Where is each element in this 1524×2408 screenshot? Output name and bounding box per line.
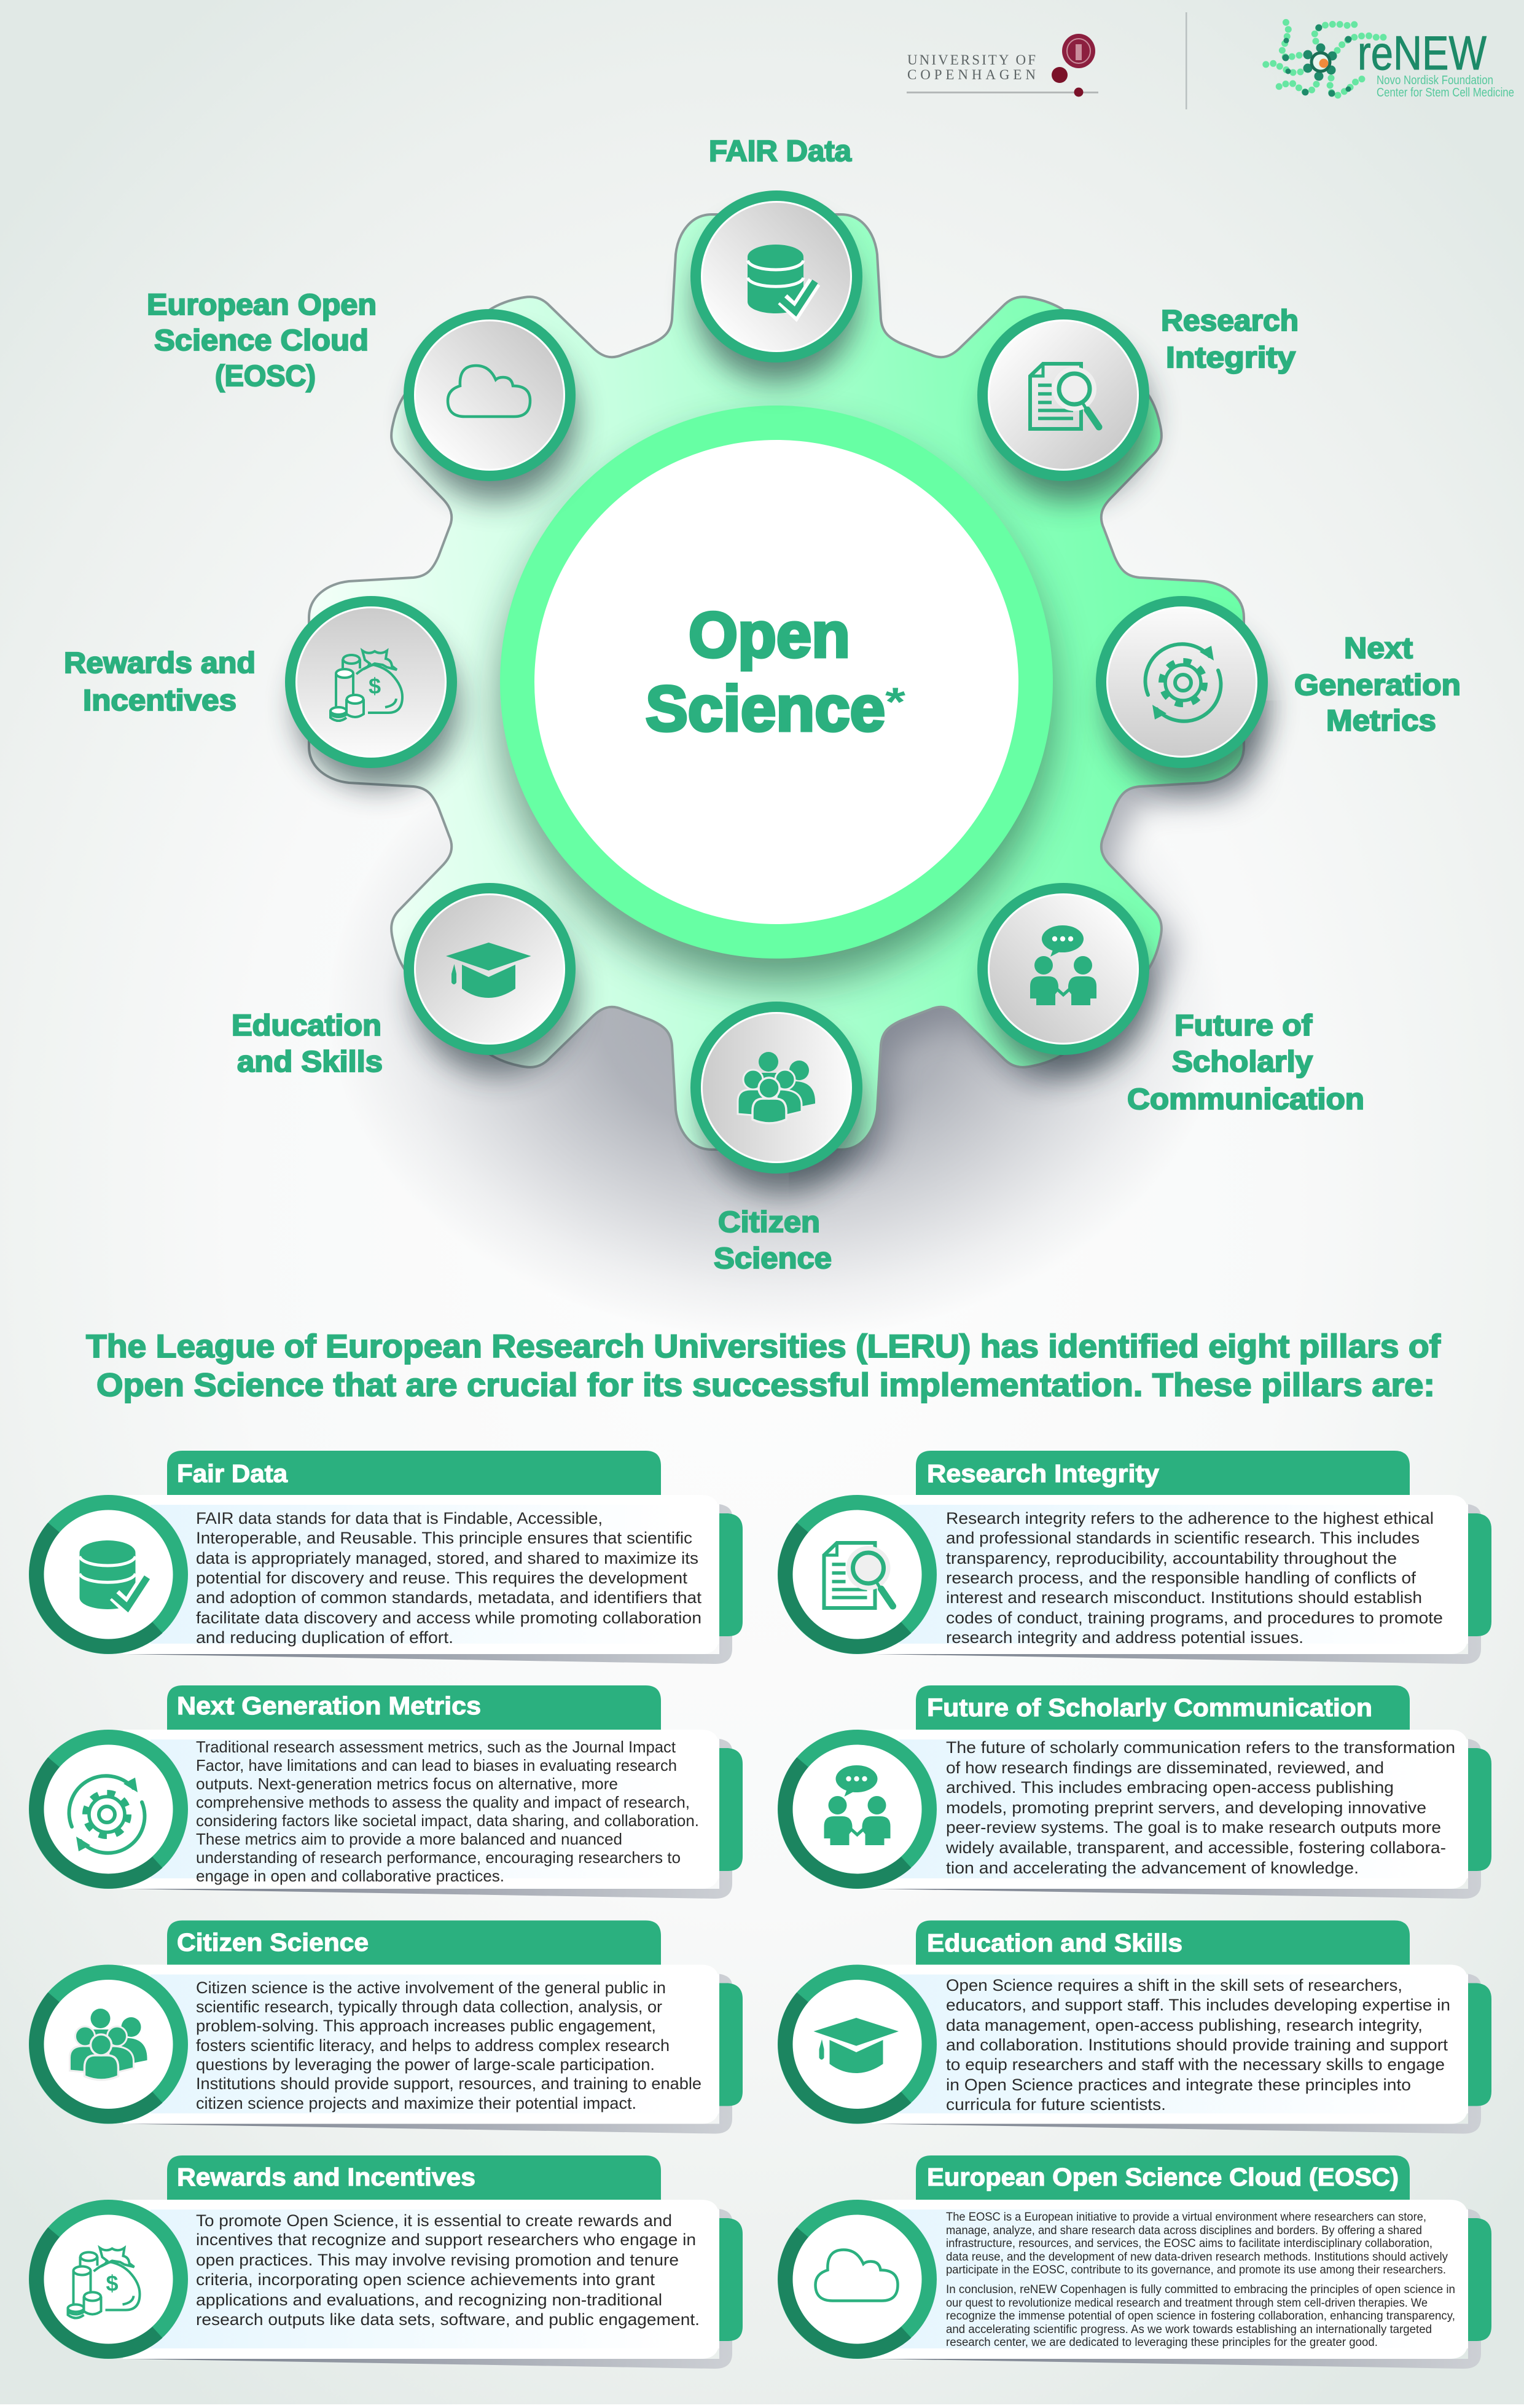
panel text: Future of Scholarly Communication: of how research findings are disseminated, reviewed, and bbox=[946, 1759, 1384, 1777]
panel text: Citizen Science bbox=[196, 1979, 701, 2112]
label: Citizen Science bbox=[714, 1206, 832, 1275]
panel text: Citizen Science: fosters scientific literacy, and helps to address complex research bbox=[196, 2036, 670, 2055]
node: Research Integrity bbox=[957, 289, 1170, 501]
logo: reNEW: reNEW bbox=[1358, 26, 1487, 80]
panel text: Rewards and Incentives: open practices. This may involve revising promotion and tenure bbox=[196, 2251, 679, 2269]
panel text: Future of Scholarly Communication: The future of scholarly communication refers to the transformation bbox=[946, 1738, 1455, 1757]
panel text: Rewards and Incentives: criteria, incorporating open science achievements into grant bbox=[196, 2270, 655, 2289]
panel text: Future of Scholarly Communication: tion and accelerating the advancement of knowledge. bbox=[946, 1859, 1359, 1877]
panel text: Fair Data: and adoption of common standards, metadata, and identifiers that bbox=[196, 1588, 702, 1607]
icon: cloud bbox=[816, 2250, 898, 2300]
label: Citizen Science: Science bbox=[714, 1242, 832, 1275]
label: Research Integrity bbox=[1161, 305, 1299, 374]
panel text: conclusion: In conclusion, reNEW Copenhagen is fully committed to embracing the principles of open science in bbox=[946, 2283, 1455, 2296]
panel: Citizen Science bbox=[29, 1921, 743, 2134]
label: Next Generation Metrics bbox=[1294, 632, 1461, 737]
label: Education and Skills: Education bbox=[232, 1010, 381, 1042]
panel: Rewards and Incentives bbox=[29, 2155, 743, 2369]
panel text: Fair Data: Interoperable, and Reusable. This principle ensures that scientific bbox=[196, 1529, 692, 1547]
central title: Open Science bbox=[646, 600, 905, 745]
panel text: Research Integrity: research process, and the responsible handling of conflicts of bbox=[946, 1569, 1417, 1587]
panel text: Future of Scholarly Communication: peer-review systems. The goal is to make research outputs more bbox=[946, 1818, 1441, 1837]
icon: document with magnifier bbox=[824, 1543, 893, 1608]
panel text: conclusion: research center, we are dedicated to leveraging these principles for the greater good. bbox=[946, 2336, 1378, 2349]
panel: Research Integrity bbox=[778, 1451, 1491, 1664]
panel text: Fair Data: facilitate data discovery and access while promoting collaboration bbox=[196, 1609, 701, 1627]
panel text: Rewards and Incentives: To promote Open Science, it is essential to create rewards and bbox=[196, 2211, 672, 2230]
panel text: Rewards and Incentives: research outputs like data sets, software, and public engagement. bbox=[196, 2310, 700, 2329]
panel text: EOSC description: participate in the EOSC, contribute to its governance, and promote its use among their researchers. bbox=[946, 2264, 1446, 2277]
panel text: Next Generation Metrics: Factor, have limitations and can lead to biases in evaluating research bbox=[196, 1756, 677, 1775]
panel text: Fair Data: and reducing duplication of effort. bbox=[196, 1628, 453, 1647]
label: Next Generation Metrics: Metrics bbox=[1326, 705, 1436, 737]
icon: money bag and coins bbox=[68, 2248, 140, 2318]
panel text: EOSC description: infrastructure, resources, and services, the EOSC aims to facilitate interdisciplinary collaboration, bbox=[946, 2237, 1432, 2250]
icon: database with check bbox=[80, 1540, 147, 1609]
panel text: conclusion: our quest to revolutionize medical research and treatment through stem cell-driven therapies. We bbox=[946, 2297, 1428, 2310]
central ring bbox=[500, 406, 1053, 959]
panel text: Fair Data bbox=[196, 1509, 702, 1647]
panel text: Next Generation Metrics: comprehensive methods to assess the quality and impact of research, bbox=[196, 1793, 690, 1811]
label: Education and Skills bbox=[232, 1010, 383, 1078]
logo: University of Copenhagen bbox=[907, 34, 1098, 97]
panel text: Next Generation Metrics: considering factors like societal impact, data sharing, and collaboration. bbox=[196, 1811, 699, 1830]
label: Future of Scholarly Communication bbox=[1127, 1010, 1364, 1116]
panel text: Education and Skills: Open Science requires a shift in the skill sets of researchers, bbox=[946, 1976, 1402, 1994]
label: Education and Skills: and Skills bbox=[237, 1046, 383, 1078]
node: Next Generation Metrics bbox=[1101, 602, 1262, 763]
label: Rewards and Incentives: Incentives bbox=[83, 684, 236, 717]
panel text: Future of Scholarly Communication: models, promoting preprint servers, and developing innovative bbox=[946, 1798, 1426, 1817]
panel text: Future of Scholarly Communication bbox=[945, 1738, 1455, 1877]
panel text: conclusion bbox=[946, 2283, 1455, 2349]
gear diagram: Open Science hub bbox=[291, 170, 1269, 1339]
label: Research Integrity: Integrity bbox=[1166, 342, 1295, 374]
panel text: Rewards and Incentives: applications and evaluations, and recognizing non-traditional bbox=[196, 2291, 662, 2309]
panel text: Citizen Science: problem-solving. This approach increases public engagement, bbox=[196, 2017, 656, 2035]
panel text: Next Generation Metrics bbox=[196, 1738, 699, 1885]
panel text: Education and Skills: and collaboration. Institutions should provide training and support bbox=[946, 2036, 1448, 2054]
panel text: Future of Scholarly Communication: widely available, transparent, and accessible, fostering collabora- bbox=[945, 1838, 1446, 1857]
panel text: EOSC description: manage, analyze, and share research data across disciplines and borders. By offering a shared bbox=[946, 2224, 1422, 2237]
panel text: Research Integrity: codes of conduct, training programs, and procedures to promote bbox=[946, 1609, 1443, 1627]
panel text: Next Generation Metrics: Traditional research assessment metrics, such as the Journal Impact bbox=[196, 1738, 676, 1756]
icon: graduation cap bbox=[813, 2018, 899, 2073]
node: European Open Science Cloud bbox=[383, 289, 596, 501]
panel text: Future of Scholarly Communication: archived. This includes embracing open-access publishing bbox=[946, 1778, 1394, 1797]
label: Next Generation Metrics: Generation bbox=[1294, 669, 1461, 702]
panel text: Research Integrity: and professional standards in scientific research. This includes bbox=[946, 1529, 1420, 1547]
panel text: Education and Skills: educators, and support staff. This includes developing expertise in bbox=[946, 1996, 1450, 2014]
label: Citizen Science: Citizen bbox=[718, 1206, 820, 1239]
logo: University of Copenhagen: UNIVERSITY OF bbox=[907, 52, 1036, 68]
panel: Future of Scholarly Communication bbox=[778, 1685, 1491, 1899]
panel text: Fair Data: potential for discovery and reuse. This requires the development bbox=[196, 1569, 688, 1587]
panel text: Citizen Science: Institutions should provide support, resources, and training to enable bbox=[196, 2074, 701, 2093]
node: Education and Skills bbox=[383, 863, 596, 1075]
heading: eight pillars statement: The League of European Research Universities (LERU) has identified eight pillars of bbox=[86, 1328, 1440, 1365]
panel text: Citizen Science: scientific research, typically through data collection, analysis, or bbox=[196, 1998, 662, 2016]
panel heading: Fair Data: Fair Data bbox=[177, 1459, 288, 1488]
panel text: Next Generation Metrics: understanding of research performance, encouraging researchers to bbox=[196, 1848, 681, 1867]
panel text: Citizen Science: Citizen science is the active involvement of the general public in bbox=[196, 1979, 666, 1997]
node: Future of Scholarly Communication bbox=[957, 863, 1170, 1075]
panel heading: Future of Scholarly Communication: Future of Scholarly Communication bbox=[927, 1693, 1372, 1722]
node: FAIR Data bbox=[670, 170, 883, 383]
label: European Open Science Cloud: Science Cloud bbox=[154, 324, 369, 357]
logo: reNEW bbox=[1265, 20, 1514, 100]
label: European Open Science Cloud: European Open bbox=[147, 289, 377, 321]
logo: University of Copenhagen: COPENHAGEN bbox=[907, 67, 1036, 82]
panel text: Next Generation Metrics: engage in open and collaborative practices. bbox=[196, 1867, 504, 1885]
panel heading: Next Generation Metrics: Next Generation Metrics bbox=[177, 1692, 481, 1720]
central title: Open Science: Science bbox=[646, 673, 885, 745]
panel text: Fair Data: FAIR data stands for data that is Findable, Accessible, bbox=[196, 1509, 603, 1528]
panel text: Citizen Science: citizen science projects and maximize their potential impact. bbox=[196, 2094, 636, 2112]
panel heading: Rewards and Incentives: Rewards and Incentives bbox=[177, 2163, 475, 2191]
panel text: Education and Skills: curricula for future scientists. bbox=[946, 2095, 1166, 2114]
panel text: Research Integrity: research integrity and address potential issues. bbox=[946, 1628, 1303, 1647]
label: Future of Scholarly Communication: Communication bbox=[1127, 1083, 1364, 1116]
heading: eight pillars statement: Open Science that are crucial for its successful implementation. These pillars are: bbox=[96, 1367, 1435, 1403]
label: Research Integrity: Research bbox=[1161, 305, 1299, 337]
panel: Education and Skills bbox=[778, 1921, 1491, 2134]
label: European Open Science Cloud bbox=[147, 289, 377, 393]
icon: group of people bbox=[70, 2009, 147, 2080]
panel text: EOSC description: data reuse, and the development of new data-driven research methods. Institutions should actively bbox=[946, 2251, 1448, 2264]
icon: gear with circular arrows bbox=[69, 1776, 144, 1853]
panel text: Research Integrity: Research integrity refers to the adherence to the highest ethical bbox=[946, 1509, 1434, 1528]
central title: Open Science: Open bbox=[689, 600, 850, 671]
panel text: Rewards and Incentives bbox=[196, 2211, 700, 2329]
panel text: Rewards and Incentives: incentives that recognize and support researchers who engage in bbox=[196, 2230, 696, 2249]
panel text: Education and Skills bbox=[946, 1976, 1450, 2114]
panel text: conclusion: and accelerating scientific progress. As we work towards establishing an internationally targeted bbox=[946, 2323, 1432, 2336]
label: European Open Science Cloud: (EOSC) bbox=[215, 360, 316, 393]
label: Next Generation Metrics: Next bbox=[1344, 632, 1413, 665]
heading: eight pillars statement bbox=[86, 1328, 1440, 1403]
panel text: Education and Skills: to equip researchers and staff with the necessary skills to engage bbox=[946, 2055, 1445, 2074]
node: Citizen Science bbox=[696, 1007, 857, 1168]
panel heading: Research Integrity: Research Integrity bbox=[927, 1459, 1159, 1488]
panel text: Research Integrity: transparency, reproducibility, accountability throughout the bbox=[946, 1549, 1397, 1567]
panel text: Research Integrity: interest and research misconduct. Institutions should establish bbox=[946, 1588, 1422, 1607]
node: Rewards and Incentives bbox=[291, 602, 451, 763]
label: Future of Scholarly Communication: Future of bbox=[1174, 1010, 1313, 1042]
logo: reNEW: Novo Nordisk Foundation bbox=[1377, 74, 1493, 87]
panel text: Fair Data: data is appropriately managed, stored, and shared to maximize its bbox=[196, 1549, 698, 1567]
label: Future of Scholarly Communication: Scholarly bbox=[1172, 1046, 1313, 1078]
panel text: Education and Skills: in Open Science practices and integrate these principles into bbox=[946, 2076, 1411, 2094]
panel text: Next Generation Metrics: These metrics aim to provide a more balanced and nuanced bbox=[196, 1830, 622, 1848]
panel text: Next Generation Metrics: outputs. Next-generation metrics focus on alternative, more bbox=[196, 1775, 618, 1793]
logo divider bbox=[1186, 12, 1187, 109]
central title: Open Science: * bbox=[885, 679, 905, 724]
icon: two people talking bbox=[824, 1765, 891, 1845]
panel text: conclusion: recognize the immense potential of open science in fostering collaboration, enhancing transparency, bbox=[946, 2310, 1455, 2323]
gear shape bbox=[309, 214, 1244, 1150]
label: Rewards and Incentives: Rewards and bbox=[64, 647, 256, 680]
central white disc bbox=[534, 440, 1018, 924]
panel heading: European Open Science Cloud: European Open Science Cloud (EOSC) bbox=[927, 2163, 1399, 2191]
panel text: Research Integrity bbox=[946, 1509, 1443, 1647]
panel: European Open Science Cloud bbox=[778, 2155, 1491, 2369]
node shadows bbox=[296, 220, 1269, 1193]
panel text: EOSC description: The EOSC is a European initiative to provide a virtual environment where researchers can store, bbox=[946, 2211, 1426, 2224]
label: FAIR Data: FAIR Data bbox=[709, 135, 851, 168]
panel: Next Generation Metrics bbox=[29, 1685, 743, 1899]
panel heading: Citizen Science: Citizen Science bbox=[177, 1928, 369, 1956]
panel: Fair Data bbox=[29, 1451, 743, 1664]
panel text: EOSC description bbox=[946, 2211, 1448, 2277]
panel heading: Education and Skills: Education and Skills bbox=[927, 1929, 1182, 1957]
label: Rewards and Incentives bbox=[64, 647, 256, 717]
panel text: Education and Skills: data management, open-access publishing, research integrity, bbox=[946, 2016, 1423, 2034]
panel text: Citizen Science: questions by leveraging the power of large-scale participation. bbox=[196, 2055, 655, 2074]
